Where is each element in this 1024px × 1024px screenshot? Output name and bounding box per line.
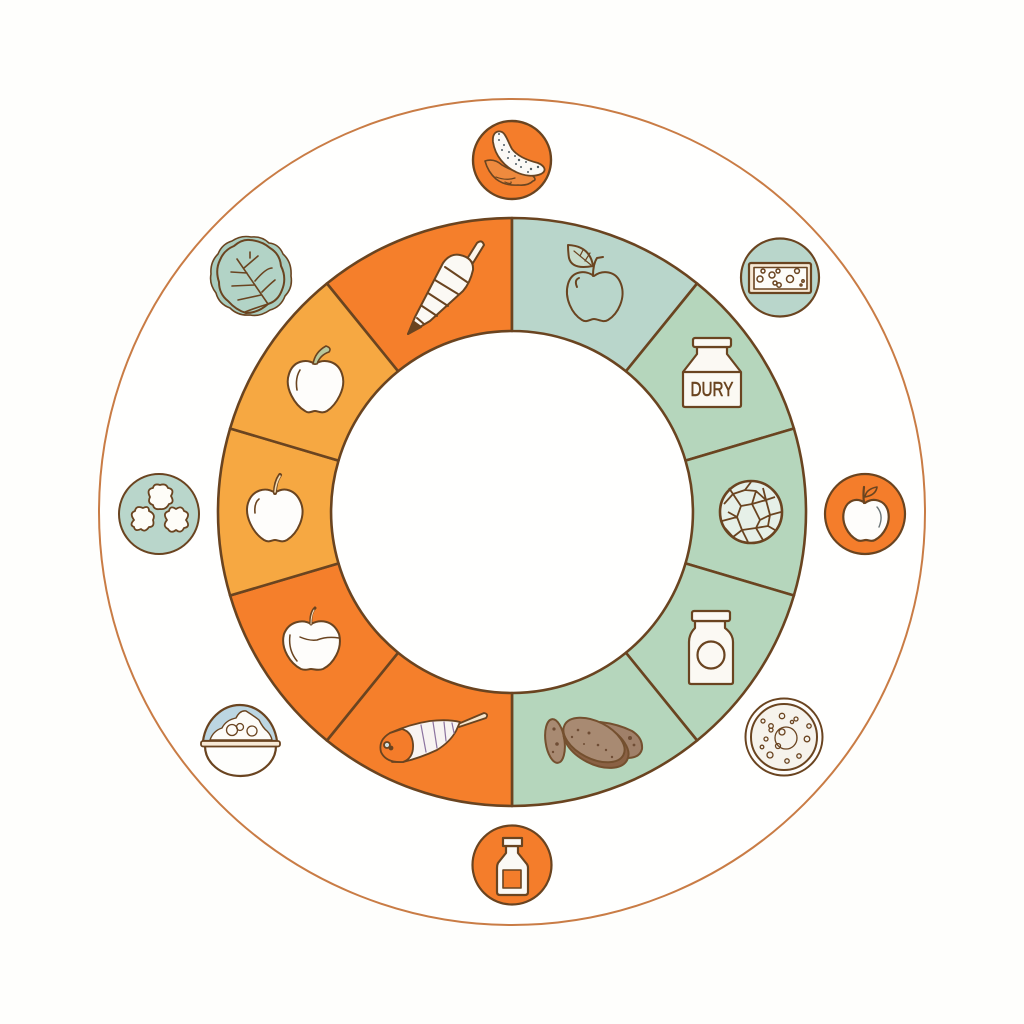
icon: flowers badge	[119, 474, 199, 554]
icon: lying carrot	[380, 713, 487, 762]
icon: cheese badge	[741, 238, 819, 316]
segment: green apple	[512, 218, 697, 371]
segment: amber apple lower	[218, 428, 338, 596]
segment: globe	[686, 428, 806, 596]
icon: apple badge	[825, 474, 905, 554]
segment: orange apple	[230, 563, 398, 740]
icon: cabbage badge	[211, 236, 291, 315]
segment: carrot	[327, 218, 512, 371]
icon: jar	[689, 611, 733, 684]
icon: seeded plate badge	[746, 698, 822, 776]
segment: bread	[512, 653, 697, 806]
icon: bread slices	[543, 709, 642, 778]
icon: cream filled roll badge	[473, 121, 551, 199]
icon: bottle badge	[472, 826, 552, 904]
icon: dairy jar	[683, 338, 741, 407]
icon: amber apple upper	[288, 346, 343, 412]
icon: orange segment apple	[283, 608, 340, 670]
segment: dairy jar	[626, 284, 794, 461]
icon: bowl badge	[201, 705, 280, 776]
outer ring	[99, 99, 925, 925]
label: DURY: DURY	[690, 379, 734, 401]
icon: carrot	[408, 241, 484, 334]
segment: amber apple upper	[230, 284, 398, 461]
icon: amber apple lower	[247, 475, 303, 541]
food wheel	[218, 218, 806, 806]
segment: jar	[626, 563, 794, 740]
icon: globe	[720, 481, 782, 543]
icon: green apple	[567, 245, 623, 321]
segment: lying carrot	[327, 653, 512, 806]
